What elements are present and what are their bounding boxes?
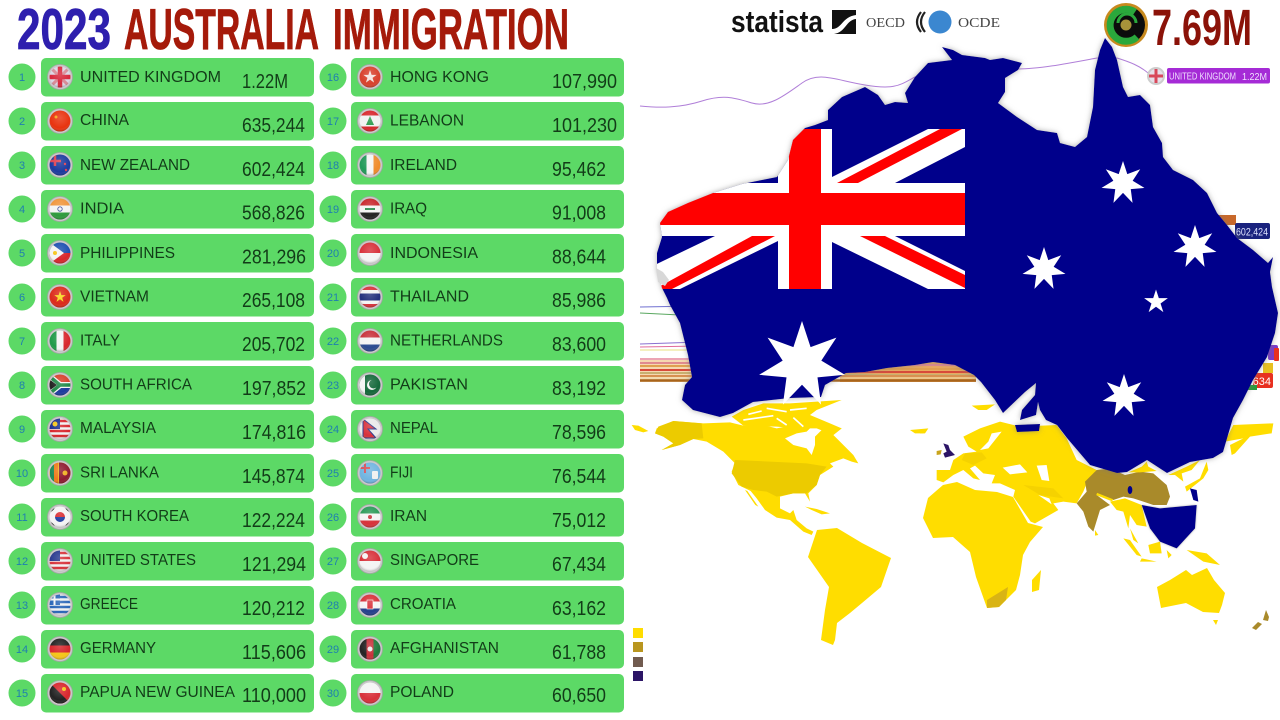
line chart traces behind the map (640, 58, 1148, 382)
Southern Cross small star (1144, 290, 1168, 312)
row 27 Singapore (320, 542, 624, 580)
row 3 New Zealand: NEW ZEALAND (80, 157, 190, 174)
icon: flag South Korea (48, 504, 72, 530)
icon: flag New Zealand (48, 152, 72, 178)
row 10 Sri Lanka: SRI LANKA (80, 464, 160, 482)
icon: flag Poland (358, 680, 382, 706)
row 22 Netherlands: 22 (327, 336, 339, 348)
row 8 South Africa: 197,852 (242, 378, 306, 400)
icon: flag Vietnam (48, 284, 72, 310)
row 11 South Korea (8, 498, 314, 536)
Australia flag map (640, 38, 1278, 473)
icon: flag Sri Lanka (48, 460, 72, 486)
row 10 Sri Lanka: 10 (16, 468, 28, 480)
emblem: gold medallion (1104, 3, 1148, 47)
row 21 Thailand: 21 (327, 292, 339, 304)
row 18 Ireland: 95,462 (552, 159, 606, 181)
row 16 Hong Kong: 16 (327, 72, 339, 84)
label stubs partly hidden behind the map: 634 (1253, 376, 1271, 388)
row 2 China: 635,244 (242, 115, 305, 137)
row 28 Croatia (320, 586, 624, 624)
panel: ranking table of 30 countries (8, 58, 624, 712)
row 11 South Korea: 11 (16, 512, 28, 524)
row 17 Lebanon: LEBANON (390, 112, 464, 130)
row 16 Hong Kong (320, 58, 624, 96)
row 13 Greece: 120,212 (242, 598, 305, 620)
row 6 Vietnam: 265,108 (242, 290, 305, 312)
row 4 India (8, 190, 314, 228)
icon: flag Germany (48, 636, 72, 662)
Southern Cross star right (1174, 225, 1216, 267)
United Kingdom (943, 443, 955, 458)
logo: statista: statista (731, 4, 824, 39)
row 10 Sri Lanka (8, 454, 314, 492)
icon: flag Malaysia (48, 416, 72, 442)
row 17 Lebanon: 17 (327, 116, 339, 128)
row 11 South Korea: 122,224 (242, 510, 305, 532)
row 15 Papua New Guinea: 110,000 (242, 685, 306, 707)
row 29 Afghanistan: AFGHANISTAN (390, 640, 499, 657)
logo: OECD: OCDE (958, 16, 1000, 31)
row 3 New Zealand: 602,424 (242, 159, 305, 181)
row 1 United Kingdom: 1.22M (242, 71, 288, 93)
row 7 Italy: 205,702 (242, 334, 305, 356)
row 17 Lebanon: 101,230 (552, 115, 617, 137)
row 20 Indonesia: INDONESIA (390, 245, 479, 262)
Eurasia and Asia (920, 404, 1273, 565)
row 23 Pakistan: PAKISTAN (390, 376, 468, 394)
row 7 Italy: 7 (19, 336, 25, 348)
row 9 Malaysia: 9 (19, 424, 25, 436)
label: United Kingdom: 1.22M (1242, 71, 1267, 83)
row 14 Germany: 115,606 (242, 642, 306, 664)
row 20 Indonesia: 20 (327, 248, 339, 260)
row 9 Malaysia (8, 410, 314, 448)
icon: flag Pakistan (358, 372, 382, 398)
icon: flag Papua New Guinea (48, 680, 72, 706)
Commonwealth star (759, 321, 845, 405)
row 19 Iraq: 91,008 (552, 202, 606, 224)
icon: flag India (48, 196, 72, 222)
icon: flag Fiji (358, 460, 382, 486)
row 24 Nepal: NEPAL (390, 420, 438, 437)
label: New Zealand value (1235, 223, 1270, 239)
row 4 India: 4 (19, 204, 25, 216)
Southeast Asia and islands (1110, 498, 1147, 528)
row 30 Poland: 30 (327, 688, 339, 700)
row 21 Thailand: THAILAND (390, 288, 469, 306)
row 30 Poland: POLAND (390, 684, 454, 701)
Union Jack canton (640, 129, 965, 289)
row 28 Croatia: CROATIA (390, 596, 457, 613)
row 7 Italy (8, 322, 314, 360)
row 26 Iran (320, 498, 624, 536)
row 8 South Africa: SOUTH AFRICA (80, 376, 193, 394)
Australia on world map (1157, 568, 1225, 613)
row 14 Germany: GERMANY (80, 640, 156, 657)
label stubs partly hidden behind the map (1217, 215, 1279, 390)
Southern Cross star bottom (1103, 374, 1145, 416)
Southern Cross star top (1102, 161, 1144, 203)
row 12 United States (8, 542, 314, 580)
row 23 Pakistan: 83,192 (552, 378, 606, 400)
South Africa (987, 587, 1008, 608)
row 15 Papua New Guinea (8, 674, 314, 712)
row 24 Nepal (320, 410, 624, 448)
map silhouette (657, 38, 1278, 473)
row 3 New Zealand (8, 146, 314, 184)
row 12 United States: 121,294 (242, 554, 306, 576)
icon: flag United States (48, 548, 72, 574)
row 10 Sri Lanka: 145,874 (242, 466, 305, 488)
row 15 Papua New Guinea: PAPUA NEW GUINEA (80, 684, 236, 701)
icon: flag Hong Kong (358, 64, 382, 90)
row 27 Singapore: 67,434 (552, 554, 606, 576)
row 13 Greece (8, 586, 314, 624)
icon: flag Indonesia (358, 240, 382, 266)
row 27 Singapore: SINGAPORE (390, 552, 479, 569)
icon: flag Italy (48, 328, 72, 354)
South America (808, 528, 891, 645)
row 11 South Korea: SOUTH KOREA (80, 508, 190, 525)
row 20 Indonesia (320, 234, 624, 272)
row 18 Ireland: IRELAND (390, 157, 457, 174)
Tasmania overlay (1142, 505, 1197, 548)
row 22 Netherlands (320, 322, 624, 360)
logo: OECD: OECD (866, 16, 905, 31)
icon: flag Iran (358, 504, 382, 530)
legend swatches (633, 628, 643, 681)
icon: flag Iraq (358, 196, 382, 222)
row 14 Germany (8, 630, 314, 668)
row 2 China: CHINA (80, 112, 130, 129)
row 28 Croatia: 28 (327, 600, 339, 612)
icon: UK marker flag (1147, 67, 1165, 85)
icon: flag Thailand (358, 284, 382, 310)
row 23 Pakistan (320, 366, 624, 404)
row 1 United Kingdom: 1 (19, 72, 25, 84)
row 1 United Kingdom (8, 58, 314, 96)
row 14 Germany: 14 (16, 644, 28, 656)
label: New Zealand value: 602,424 (1236, 226, 1268, 238)
icon: flag Greece (48, 592, 72, 618)
label: United Kingdom: UNITED KINGDOM (1169, 72, 1236, 82)
icon: flag Nepal (358, 416, 382, 442)
icon: flag Singapore (358, 548, 382, 574)
row 29 Afghanistan: 61,788 (552, 642, 606, 664)
icon: flag Croatia (358, 592, 382, 618)
row 24 Nepal: 78,596 (552, 422, 606, 444)
Southern Cross star left (1023, 247, 1065, 289)
coastal grey smudge (656, 268, 669, 286)
row 12 United States: UNITED STATES (80, 552, 196, 569)
row 5 Philippines: PHILIPPINES (80, 245, 175, 262)
row 5 Philippines: 281,296 (242, 246, 306, 268)
row 26 Iran: IRAN (390, 508, 427, 525)
row 6 Vietnam: 6 (19, 292, 25, 304)
row 23 Pakistan: 23 (327, 380, 339, 392)
row 25 Fiji: FIJI (390, 464, 413, 482)
row 19 Iraq: 19 (327, 204, 339, 216)
Africa (923, 482, 1043, 608)
row 9 Malaysia: 174,816 (242, 422, 306, 444)
row 25 Fiji: 76,544 (552, 466, 606, 488)
row 29 Afghanistan: 29 (327, 644, 339, 656)
row 22 Netherlands: NETHERLANDS (390, 332, 503, 350)
row 25 Fiji (320, 454, 624, 492)
North America (632, 400, 928, 535)
row 30 Poland: 60,650 (552, 685, 606, 707)
row 27 Singapore: 27 (327, 556, 339, 568)
label: United Kingdom (1147, 67, 1270, 85)
row 12 United States: 12 (16, 556, 28, 568)
row 26 Iran: 75,012 (552, 510, 606, 532)
row 6 Vietnam (8, 278, 314, 316)
icon: flag Netherlands (358, 328, 382, 354)
row 16 Hong Kong: HONG KONG (390, 69, 489, 86)
row 2 China: 2 (19, 116, 25, 128)
row 13 Greece: GREECE (80, 596, 138, 613)
world map (632, 400, 1273, 645)
Ireland (937, 450, 942, 455)
row 18 Ireland (320, 146, 624, 184)
row 29 Afghanistan (320, 630, 624, 668)
row 24 Nepal: 24 (327, 424, 339, 436)
row 30 Poland (320, 674, 624, 712)
icon: flag Philippines (48, 240, 72, 266)
row 8 South Africa (8, 366, 314, 404)
row 25 Fiji: 25 (327, 468, 339, 480)
row 16 Hong Kong: 107,990 (552, 71, 617, 93)
row 19 Iraq: IRAQ (390, 200, 427, 218)
row 28 Croatia: 63,162 (552, 598, 606, 620)
row 9 Malaysia: MALAYSIA (80, 420, 157, 437)
New Zealand (1252, 622, 1262, 630)
row 20 Indonesia: 88,644 (552, 246, 606, 268)
Madagascar (1032, 570, 1041, 592)
row 5 Philippines: 5 (19, 248, 25, 260)
row 22 Netherlands: 83,600 (552, 334, 606, 356)
row 15 Papua New Guinea: 15 (16, 688, 28, 700)
row 17 Lebanon (320, 102, 624, 140)
row 18 Ireland: 18 (327, 160, 339, 172)
row 21 Thailand: 85,986 (552, 290, 606, 312)
India China band (1077, 468, 1170, 532)
row 3 New Zealand: 3 (19, 160, 25, 172)
title (17, 0, 569, 62)
icon: flag Afghanistan (358, 636, 382, 662)
icon: flag China (48, 108, 72, 134)
row 2 China (8, 102, 314, 140)
row 4 India: INDIA (80, 200, 125, 218)
row 7 Italy: ITALY (80, 332, 120, 350)
row 6 Vietnam: VIETNAM (80, 288, 149, 306)
row 26 Iran: 26 (327, 512, 339, 524)
logo: OECD (866, 10, 1000, 34)
icon: flag United Kingdom (48, 64, 72, 90)
row 1 United Kingdom: UNITED KINGDOM (80, 69, 221, 86)
icon: flag Lebanon (358, 108, 382, 134)
row 21 Thailand (320, 278, 624, 316)
row 8 South Africa: 8 (19, 380, 25, 392)
row 19 Iraq (320, 190, 624, 228)
row 13 Greece: 13 (16, 600, 28, 612)
row 4 India: 568,826 (242, 202, 305, 224)
icon: flag Ireland (358, 152, 382, 178)
icon: flag South Africa (48, 372, 72, 398)
row 5 Philippines (8, 234, 314, 272)
